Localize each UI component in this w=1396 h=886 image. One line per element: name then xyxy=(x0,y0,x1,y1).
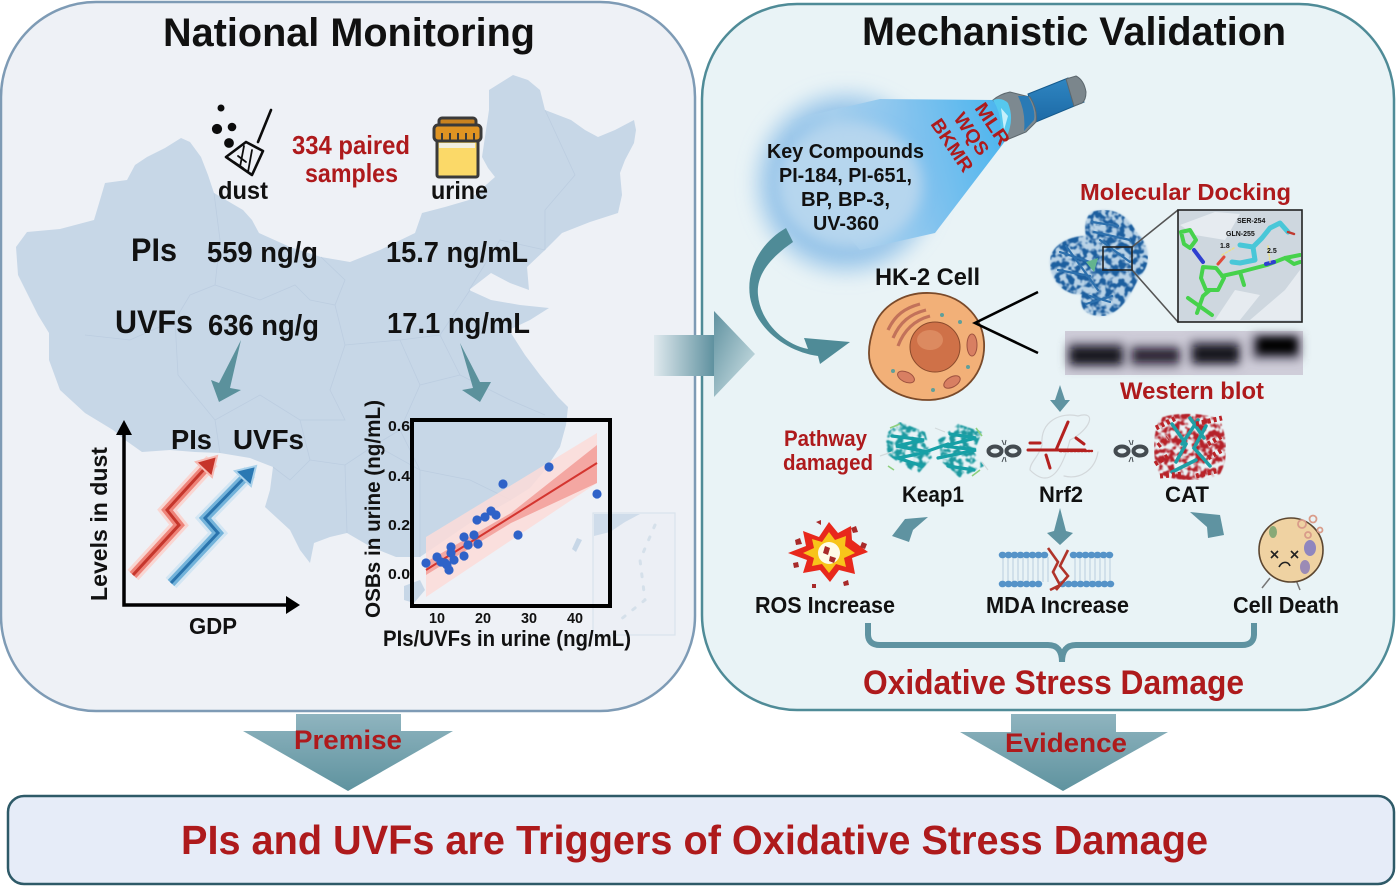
docking inset: 1.8 xyxy=(1220,243,1230,250)
sample count xyxy=(292,130,410,188)
icon: HK-2 cell xyxy=(869,293,984,400)
panel background xyxy=(702,4,1394,710)
key compounds text: PI-184, PI-651, xyxy=(779,165,912,187)
label: MDA increase: MDA Increase xyxy=(986,592,1129,618)
docking inset: GLN-255 xyxy=(1226,231,1255,238)
spotlight methods: MLR, WQS, BKMR xyxy=(926,99,1014,177)
arrow: urine to scatter chart xyxy=(460,343,491,402)
y ticks: 0.6 xyxy=(388,418,410,435)
spotlight methods: MLR, WQS, BKMR: MLR xyxy=(970,99,1014,150)
scatter points xyxy=(421,462,602,575)
label: pathway damaged: damaged xyxy=(783,450,873,475)
axis arrowhead vertical xyxy=(116,420,132,435)
trend arrow: UVFs xyxy=(171,466,256,583)
protein: Keap1 xyxy=(880,422,988,478)
data row: PIs: 559 ng/g xyxy=(207,237,318,269)
spotlight methods: MLR, WQS, BKMR: WQS xyxy=(949,109,993,160)
label: dust: dust xyxy=(218,177,269,205)
protein structure: docking overview xyxy=(1050,210,1148,316)
arrow: cell to pathway xyxy=(1050,385,1070,412)
map inset frame xyxy=(593,513,675,635)
label: ROS increase: ROS Increase xyxy=(755,592,895,618)
chart axes xyxy=(124,430,290,605)
arrow: compounds to cell xyxy=(749,228,850,364)
y axis label: OSBs in urine (ng/mL) xyxy=(362,400,385,618)
panel: mechanistic validation xyxy=(702,4,1394,710)
x axis label: PIs/UVFs in urine (ng/mL) xyxy=(383,626,631,651)
sample count: samples xyxy=(305,158,398,188)
data row: UVFs: 17.1 ng/mL xyxy=(387,308,530,340)
title: Mechanistic Validation: Mechanistic Validation xyxy=(862,10,1286,54)
icon: damaged membrane xyxy=(1002,548,1114,590)
series label PIs: PIs xyxy=(171,424,212,455)
label: CAT: CAT xyxy=(1165,482,1210,507)
y axis label: Levels in dust xyxy=(86,447,112,601)
arrow: monitoring to validation xyxy=(654,311,755,397)
conclusion banner xyxy=(8,796,1394,884)
series label UVFs: UVFs xyxy=(233,424,304,455)
x ticks: 10 xyxy=(429,610,445,627)
data row: UVFs xyxy=(115,304,530,342)
heading: molecular docking: Molecular Docking xyxy=(1080,179,1291,205)
regression line xyxy=(426,463,597,570)
arrow: evidence: Evidence xyxy=(1005,728,1127,758)
y ticks: 0.4 xyxy=(388,468,411,485)
data row: UVFs: UVFs xyxy=(115,304,193,340)
key compounds text: UV-360 xyxy=(813,213,879,235)
y ticks: 0.2 xyxy=(388,517,410,534)
x ticks: 40 xyxy=(567,610,583,627)
protein: CAT xyxy=(1154,414,1226,480)
label: Nrf2: Nrf2 xyxy=(1039,482,1083,507)
y ticks: 0.0 xyxy=(388,566,410,583)
arrow: evidence xyxy=(960,714,1168,791)
docking inset xyxy=(1178,210,1302,322)
x ticks: 30 xyxy=(521,610,537,627)
chart: levels in dust versus GDP xyxy=(86,420,304,639)
arrow: CAT to cell death xyxy=(1190,512,1224,538)
arrow: dust to trend chart xyxy=(211,340,241,402)
icon: ROS explosion xyxy=(788,520,868,588)
icon: broken link left xyxy=(988,440,1020,462)
arrow: premise xyxy=(243,714,453,791)
key compounds text xyxy=(767,141,924,235)
trend arrow: PIs xyxy=(133,456,217,575)
icon: flashlight xyxy=(993,76,1086,141)
docking inset: SER-254 xyxy=(1237,218,1266,225)
x axis label: GDP xyxy=(189,613,237,639)
label: cell death: Cell Death xyxy=(1233,592,1339,618)
data row: PIs xyxy=(131,232,528,269)
data row: PIs: 15.7 ng/mL xyxy=(386,237,528,269)
western blot image xyxy=(1065,331,1303,375)
brace grouping outcomes xyxy=(868,623,1254,662)
light spotlight on key compounds xyxy=(746,83,1006,283)
chart: OSBs versus PIs/UVFs scatter xyxy=(362,400,631,651)
arrow: premise: Premise xyxy=(294,725,402,755)
confidence band inner xyxy=(426,445,597,575)
icon: dying cell xyxy=(1259,516,1323,590)
panel background xyxy=(1,2,695,711)
sample count: 334 paired xyxy=(292,130,410,160)
arrow: Keap1 to ROS xyxy=(892,517,928,542)
Taiwan island xyxy=(572,538,582,552)
map of China xyxy=(16,75,636,603)
data row: UVFs: 636 ng/g xyxy=(208,310,319,342)
x ticks xyxy=(429,610,583,627)
y ticks xyxy=(388,418,411,583)
x ticks: 20 xyxy=(475,610,491,627)
label: urine: urine xyxy=(431,177,488,205)
docking inset connector xyxy=(1132,210,1178,322)
key compounds text: BP, BP-3, xyxy=(801,189,890,211)
icon: urine jar xyxy=(434,118,481,177)
protein: Nrf2 xyxy=(1028,415,1098,478)
icon: broken link right xyxy=(1116,440,1146,462)
heading: oxidative stress damage: Oxidative Stress Damage xyxy=(863,664,1244,702)
icon: dust broom xyxy=(213,106,271,175)
conclusion banner: PIs and UVFs are Triggers of Oxidative Stress Damage xyxy=(181,817,1208,863)
title: National Monitoring: National Monitoring xyxy=(163,11,535,55)
small selection box xyxy=(1103,247,1132,270)
axis arrowhead horizontal xyxy=(286,596,300,614)
confidence band outer xyxy=(426,433,597,597)
data row: PIs: PIs xyxy=(131,232,177,268)
spotlight methods: MLR, WQS, BKMR: BKMR xyxy=(926,115,977,177)
label: pathway damaged: Pathway xyxy=(784,426,868,451)
key compounds text: Key Compounds xyxy=(767,141,924,163)
Hainan island xyxy=(404,580,425,603)
label: HK-2 cell: HK-2 Cell xyxy=(875,264,980,291)
heading: western blot: Western blot xyxy=(1120,378,1264,405)
chart frame xyxy=(412,420,610,606)
panel: national monitoring xyxy=(1,2,695,711)
zoom lines from cell xyxy=(975,292,1038,353)
docking inset: 2.5 xyxy=(1267,248,1277,255)
arrow: Nrf2 to MDA xyxy=(1047,508,1073,545)
label: pathway damaged xyxy=(783,426,873,475)
label: Keap1: Keap1 xyxy=(902,482,964,507)
